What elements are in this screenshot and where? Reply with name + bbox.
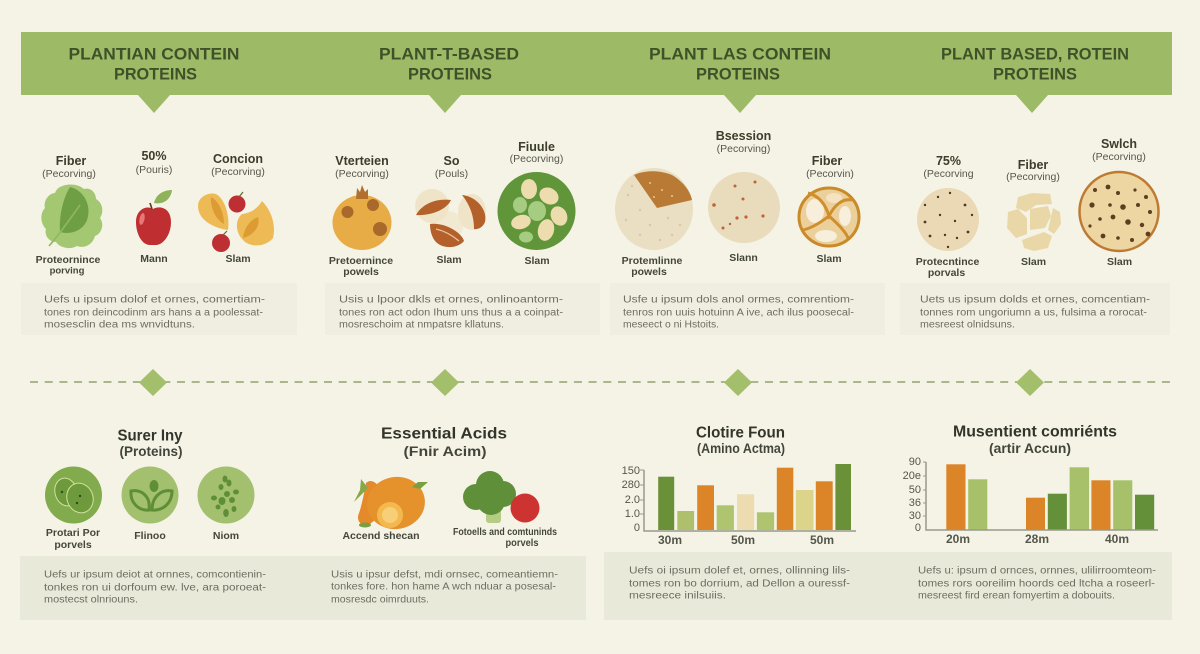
text block: tenros ron uuis hotuinn A ive, ach ilus poosecal- (623, 308, 854, 318)
label: slam: Slam (436, 254, 462, 266)
icon: seeded flatbread (917, 188, 979, 251)
text block: Uefs ur ipsum deiot at ornnes, comcontienin- (44, 570, 266, 580)
icon: speckled flatbread (708, 172, 780, 243)
label: proteornince: porving (50, 266, 85, 276)
label: 50% (136, 149, 172, 176)
heading: Surer Iny (118, 428, 183, 444)
label: accend shecan: Accend shecan (342, 530, 420, 542)
label: fotoells (453, 526, 557, 549)
text block: Usfe u ipsum dols anol ormes, comrentiom- (623, 294, 854, 306)
label: fotoells: porvels (506, 537, 539, 549)
label: swlch (1092, 137, 1146, 163)
label: fiber: Fiber (1018, 158, 1048, 172)
label: fiuule: Fiuule (518, 140, 555, 154)
label: fiber (42, 154, 96, 180)
label: fiber: Fiber (812, 154, 842, 168)
icon: orange and carrot (354, 472, 429, 534)
label: vterteien: Vterteien (335, 154, 389, 168)
heading: column 1: PROTEINS (114, 64, 197, 84)
heading: column 4 (941, 44, 1129, 84)
label: protecntince: porvals (928, 267, 965, 279)
bar chart: 50m (731, 533, 755, 547)
text block (629, 566, 850, 602)
bar chart: 0 (915, 522, 921, 534)
icon: green seed plate (498, 172, 576, 250)
icon: round cookie fruit (332, 185, 392, 250)
label: so (435, 154, 468, 180)
icon: grain wedge (615, 168, 693, 250)
icon: cracked seeds (1007, 193, 1061, 251)
label: 75% (923, 154, 974, 180)
panel: essential acids (331, 426, 558, 606)
icon: pods circle (45, 466, 102, 524)
label: slam: Slam (816, 253, 842, 265)
label: fiber: Fiber (56, 154, 86, 168)
label: pretoernince: Pretoernince (329, 255, 393, 267)
divider with diamonds (30, 369, 1170, 396)
label: protecntince: Protecntince (916, 256, 979, 268)
label: slann: Slann (729, 252, 758, 264)
heading: column 2: PROTEINS (408, 64, 492, 84)
heading: column 1: PLANTIAN CONTEIN (68, 44, 240, 64)
label: so: (Pouls) (435, 168, 468, 180)
text block (900, 283, 1170, 335)
bar chart: 2.0 (625, 494, 640, 506)
heading (696, 424, 785, 456)
icon: nuts (415, 189, 486, 247)
text block: Uefs oi ipsum dolef et, ornes, ollinning lils- (629, 566, 850, 576)
text block (325, 283, 600, 335)
bar chart: 50m (810, 533, 834, 547)
label: niom: Niom (213, 530, 239, 542)
bar chart: 36 (909, 497, 921, 509)
bar chart: 30 (909, 510, 921, 522)
text block: mosesclin dea ms wnvidtuns. (44, 320, 195, 330)
label: 75%: (Pecorving (923, 168, 974, 180)
text block: tonkes ron ui dorfoum ew. lve, ara poroeat- (44, 582, 266, 594)
text block: tones ron act odon Ihum uns thus a a coinpat- (339, 308, 563, 318)
text block (918, 566, 1156, 602)
text block: Uefs u ipsum dolof et ornes, comertiam- (44, 294, 265, 306)
bar chart: 150 (622, 465, 640, 477)
label: swlch: (Pecorving) (1092, 151, 1146, 163)
label: concion (211, 152, 265, 178)
label: slam: Slam (524, 255, 550, 267)
icon: broccoli and tomato (463, 471, 540, 523)
heading: column 4: PLANT BASED, ROTEIN (941, 44, 1129, 64)
label: so: So (444, 154, 460, 168)
text block (610, 283, 885, 335)
text block (44, 570, 266, 606)
heading: Essential Acids (381, 426, 507, 442)
heading: (artir Accun) (989, 440, 1071, 456)
label: vterteien: (Pecorving) (335, 168, 389, 180)
bar chart: 280 (622, 479, 640, 491)
heading (953, 424, 1117, 456)
label: fiber (1006, 158, 1060, 183)
icon: walnut circle (799, 188, 859, 246)
label: slam: Slam (225, 253, 251, 265)
label: fiber: (Pecorving) (42, 168, 96, 180)
icon: leaves circle (122, 466, 178, 524)
label: fiuule: (Pecorving) (510, 153, 563, 165)
label: pretoernince (329, 255, 393, 278)
text block: Usis u ipsur defst, mdi ornsec, comeantiemn- (331, 570, 558, 580)
text block: tomes ron bo dorrium, ad Dellon a ouressf- (629, 578, 850, 590)
panel: surer iny (44, 428, 266, 606)
bar chart (622, 464, 856, 547)
panel: top column 4 (900, 137, 1170, 335)
panel: top column 3 (610, 129, 885, 335)
text block: meseect o ni Hstoits. (623, 320, 719, 330)
label: fiuule (510, 140, 563, 165)
heading (381, 426, 507, 459)
heading: column 3: PROTEINS (696, 64, 780, 84)
text block: mesreest fird erean fomyertim a dobouits. (918, 590, 1115, 602)
label: swlch: Swlch (1101, 137, 1137, 151)
text block (331, 570, 558, 606)
text block: mosreschoim at nmpatsre kllatuns. (339, 320, 504, 330)
heading: column 4: PROTEINS (993, 64, 1077, 84)
heading (118, 428, 183, 459)
label: vterteien (335, 154, 389, 180)
label: fiber (806, 154, 854, 180)
label: protari por: porvels (54, 539, 92, 551)
label: slam: Slam (1021, 256, 1046, 268)
label: bsession: Bsession (716, 129, 771, 143)
label: bsession (716, 129, 771, 155)
label: concion: Concion (213, 152, 263, 166)
heading: (Fnir Acim) (404, 443, 486, 459)
text block: mostecst olnriouns. (44, 594, 138, 606)
text block: tonnes rom ungoriumn a us, fulsima a rorocat- (920, 308, 1147, 318)
label: mann: Mann (140, 253, 168, 265)
label: protemlinne: Protemlinne (622, 255, 682, 267)
icon: speckled round loaf (1080, 172, 1158, 251)
pointer: column 1 (138, 95, 170, 113)
pointer: column 3 (724, 95, 756, 113)
label: proteornince (36, 254, 101, 276)
label: protemlinne (622, 255, 682, 278)
heading: column 1 (68, 44, 240, 84)
label: flinoo: Flinoo (134, 530, 166, 542)
label: protari por (46, 527, 100, 551)
icon: peaches and cherries (198, 192, 274, 252)
heading: column 3 (649, 44, 831, 84)
pointer: column 2 (429, 95, 461, 113)
heading: column 3: PLANT LAS CONTEIN (649, 44, 831, 64)
pointer: column 4 (1016, 95, 1048, 113)
text block: Usis u lpoor dkls et ornes, onlinoantorm- (339, 294, 563, 306)
bar chart: 90 (909, 456, 921, 468)
bar chart: 1.0 (625, 508, 640, 520)
label: 50%: 50% (141, 149, 167, 163)
bar chart: 28m (1025, 532, 1049, 546)
text block: tonkes fore. hon hame A wch nduar a posesal- (331, 582, 556, 592)
label: pretoernince: powels (343, 266, 379, 278)
label: 50%: (Pouris) (136, 164, 172, 176)
bottom background panels (20, 552, 1172, 620)
label: fiber: (Pecorvin) (806, 168, 854, 180)
icon: seeds circle (198, 466, 254, 524)
label: 75%: 75% (936, 154, 961, 168)
label: proteornince: Proteornince (36, 254, 101, 266)
heading: (Amino Actma) (697, 440, 785, 456)
label: slam: Slam (1107, 256, 1132, 268)
text block: tones ron deincodinm ars hans a a poolessat- (44, 308, 263, 318)
text block: tomes rors ooreilim hoords ced ltcha a roseerl- (918, 578, 1155, 590)
label: protari por: Protari Por (46, 527, 100, 539)
label: protecntince (916, 256, 979, 279)
panel: musentient chart (903, 424, 1158, 602)
label: concion: (Pecorving) (211, 166, 265, 178)
icon: lettuce leaf (41, 185, 102, 248)
text block: mesreest olnidsuns. (920, 320, 1015, 330)
heading: column 2: PLANT-T-BASED (379, 44, 519, 64)
heading: Musentient comriénts (953, 424, 1117, 440)
label: protemlinne: powels (631, 266, 667, 278)
bar chart (903, 456, 1158, 546)
icon: apple (136, 190, 172, 245)
bar chart: 0 (634, 522, 640, 534)
header banner (21, 32, 1172, 113)
bar chart: 20e (903, 470, 921, 482)
bar chart: 50 (909, 484, 921, 496)
label: bsession: (Pecorving) (717, 143, 770, 155)
bar chart: 20m (946, 532, 970, 546)
label: fotoells: Fotoells and comtuninds (453, 526, 557, 538)
text block: mesreece inilsuiis. (629, 590, 726, 602)
text block (21, 283, 297, 335)
panel: top column 1 (21, 149, 297, 335)
panel: top column 2 (325, 140, 600, 335)
label: fiber: (Pecorving) (1006, 171, 1060, 183)
bar chart: 30m (658, 533, 682, 547)
heading: (Proteins) (120, 443, 182, 459)
text block: mosresdc oimrduuts. (331, 594, 429, 606)
text block: Uets us ipsum dolds et ornes, comcentiam- (920, 294, 1150, 306)
heading: column 2 (379, 44, 519, 84)
bar chart: 40m (1105, 532, 1129, 546)
panel: clotire foun chart (622, 424, 856, 602)
heading: Clotire Foun (696, 424, 785, 442)
text block: Uefs u: ipsum d ornces, ornnes, ulilirroomteom- (918, 566, 1156, 576)
